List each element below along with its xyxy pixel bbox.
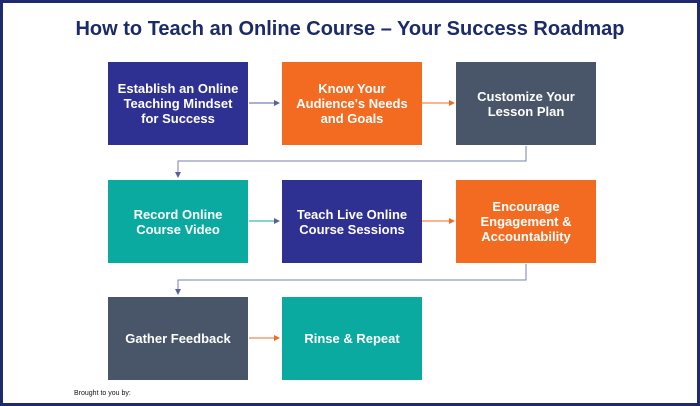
footer text: Brought to you by: [74,390,131,397]
box: engagement [456,180,596,263]
box: live sessions [282,180,422,263]
box: audience [282,62,422,145]
box: live sessions: Teach Live Online Course Sessions [297,206,407,236]
box: lesson plan: Customize Your Lesson Plan [477,88,575,118]
box: lesson plan [456,62,596,145]
box: engagement: Encourage Engagement & Accountability [480,199,572,244]
title: How to Teach an Online Course – Your Success Roadmap [75,18,625,40]
box: record video: Record Online Course Video [134,206,222,236]
box: repeat [282,297,422,380]
box: record video [108,180,248,263]
box: mindset [108,62,248,145]
box: repeat: Rinse & Repeat [304,331,400,346]
box: feedback [108,297,248,380]
box: feedback: Gather Feedback [125,331,231,346]
box: audience: Know Your Audience's Needs and Goals [296,81,408,126]
box: mindset: Establish an Online Teaching Mindset for Success [118,81,238,126]
